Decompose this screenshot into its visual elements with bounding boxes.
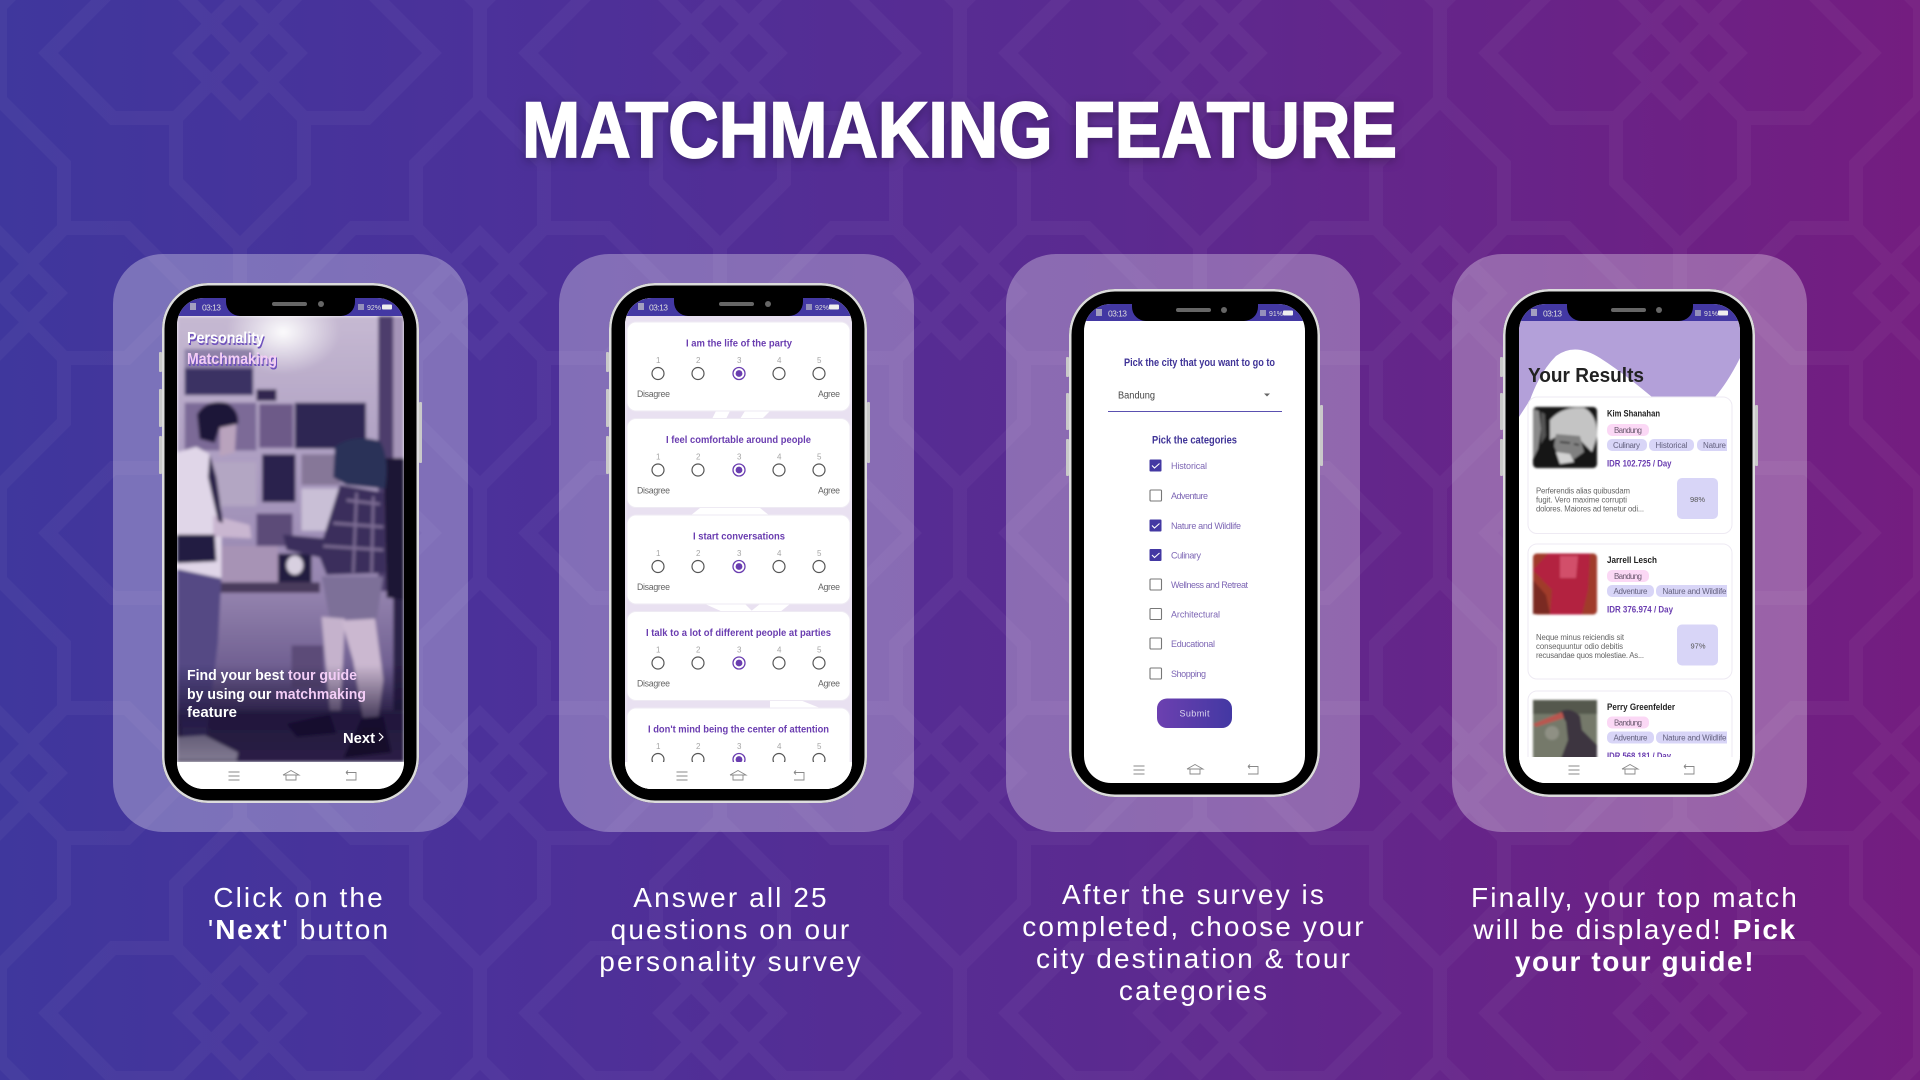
caption: step 3	[1022, 879, 1366, 1006]
category checklist: Adventure	[1171, 491, 1208, 501]
text: find your best tour guide	[187, 668, 366, 721]
screen: categories: 91%	[1269, 311, 1283, 318]
survey card 1: Agree	[818, 389, 840, 399]
guide card: Kim Shanahan: Kim Shanahan	[1607, 408, 1660, 420]
navigation bar	[228, 770, 356, 780]
survey card 2: 12345	[656, 452, 822, 462]
survey card 4: Disagree	[637, 678, 670, 688]
category checklist	[1150, 460, 1248, 679]
survey card 5	[627, 708, 850, 797]
survey card 1: 12345	[656, 356, 822, 365]
survey card 2: Disagree	[637, 486, 670, 496]
guide card: Kim Shanahan: IDR 102.725 / Day	[1607, 458, 1672, 470]
guide card: Perry Greenfelder: Adventure	[1614, 734, 1648, 742]
screen: results: 91%	[1704, 311, 1718, 318]
survey card 3: I start conversations	[693, 530, 785, 542]
caption: step 3: completed, choose your	[1022, 911, 1366, 942]
screen: intro	[177, 298, 404, 789]
guide card: Jarrell Lesch	[1528, 544, 1732, 679]
navigation bar	[1568, 764, 1694, 774]
guide card: Jarrell Lesch: Nature and Wildlife	[1662, 587, 1727, 596]
guide card: Perry Greenfelder: Nature and Wildlife	[1662, 734, 1727, 742]
screen: survey	[625, 298, 852, 789]
caption: step 1: 'Next' button	[208, 914, 390, 945]
guide card: Jarrell Lesch: recusandae quos molestiae. As...	[1536, 651, 1644, 660]
panel: step 3 city and categories	[1006, 254, 1360, 832]
screen: results: 03:13	[1543, 308, 1562, 318]
portrait: Jarrell Lesch	[1533, 554, 1597, 614]
heading: personality matchmaking	[187, 330, 277, 368]
category checklist: Nature and Wildlife	[1171, 521, 1241, 531]
heading: your results: Your Results	[1528, 364, 1644, 387]
caption: step 2: questions on our	[611, 914, 851, 945]
guide card: Kim Shanahan: fugit. Vero maxime corrupti	[1536, 496, 1627, 504]
navigation bar	[1134, 764, 1258, 774]
next button: Next	[343, 730, 375, 747]
guide card: Jarrell Lesch: 97%	[1690, 642, 1706, 650]
phone: your results	[1503, 289, 1755, 797]
survey card 1: I am the life of the party	[686, 338, 792, 350]
screen: survey: 03:13	[649, 302, 668, 312]
guide card: Perry Greenfelder: IDR 568.181 / Day	[1607, 751, 1672, 762]
caption: step 1: Click on the	[213, 882, 385, 913]
survey card 2: I feel comfortable around people	[666, 434, 811, 446]
survey card 4: 12345	[656, 646, 822, 654]
navigation bar	[676, 770, 804, 780]
submit button	[1157, 698, 1232, 728]
guide card: Jarrell Lesch: consequuntur odio debitis	[1536, 642, 1623, 651]
heading: personality matchmaking: Personality	[187, 330, 264, 347]
notch	[1567, 304, 1693, 321]
phone: personality survey	[609, 283, 867, 803]
category checklist: Architectural	[1171, 610, 1220, 620]
category checklist: Historical	[1171, 461, 1207, 471]
guide card: Kim Shanahan: Nature	[1703, 441, 1727, 450]
panel: step 1 next button	[113, 254, 468, 832]
caption: step 2: personality survey	[599, 946, 863, 977]
survey card 4: Agree	[818, 678, 840, 688]
caption: step 4	[1471, 882, 1799, 977]
screen: survey: 92%	[815, 305, 829, 312]
guide card: Jarrell Lesch: Jarrell Lesch	[1607, 555, 1657, 566]
category checklist: Culinary	[1171, 550, 1202, 560]
submit button: Submit	[1180, 708, 1210, 718]
survey card 5: 12345	[656, 742, 822, 751]
caption: step 4: Finally, your top match	[1471, 882, 1799, 913]
guide card: Perry Greenfelder: Perry Greenfelder	[1607, 702, 1675, 713]
phone: personality matchmaking intro	[162, 283, 419, 803]
survey card 1: Disagree	[637, 389, 670, 399]
notch	[1132, 304, 1258, 321]
heading: personality matchmaking: Matchmaking	[187, 351, 277, 368]
guide card: Jarrell Lesch: Bandung	[1614, 572, 1642, 581]
caption: step 3: After the survey is	[1062, 879, 1326, 910]
heading: pick the city: Pick the city that you want to go to	[1124, 357, 1275, 369]
notch	[226, 298, 355, 316]
survey card 3: Agree	[818, 582, 840, 592]
city dropdown: Bandung	[1118, 390, 1155, 402]
guide card: Jarrell Lesch: IDR 376.974 / Day	[1607, 604, 1674, 616]
text: find your best tour guide: feature	[187, 705, 237, 721]
survey card 5: I don't mind being the center of attention	[648, 724, 829, 736]
guide card: Perry Greenfelder	[1528, 691, 1732, 826]
survey card 1	[627, 322, 850, 411]
portrait: Perry Greenfelder	[1533, 700, 1597, 761]
guide card: Kim Shanahan: Perferendis alias quibusdam	[1536, 486, 1630, 496]
caption: step 2: Answer all 25	[633, 882, 829, 913]
portrait: Kim Shanahan	[1533, 407, 1597, 468]
caption: step 3: categories	[1119, 975, 1269, 1006]
notch	[674, 298, 803, 316]
guide card: Jarrell Lesch: Neque minus reiciendis sit	[1536, 633, 1625, 642]
screen: categories: 03:13	[1108, 308, 1127, 318]
guide card: Kim Shanahan: 98%	[1690, 495, 1705, 504]
category checklist: Shopping	[1171, 669, 1206, 679]
caption: step 3: city destination & tour	[1036, 943, 1352, 974]
text: find your best tour guide: by using our matchmaking	[187, 687, 366, 703]
survey card 4: I talk to a lot of different people at parties	[646, 627, 831, 639]
guide card: Jarrell Lesch: Adventure	[1614, 587, 1648, 596]
panel: step 2 survey	[559, 254, 914, 832]
phone: city and categories	[1069, 289, 1320, 797]
guide card: Kim Shanahan	[1528, 397, 1732, 534]
guide card: Perry Greenfelder: Bandung	[1614, 718, 1642, 728]
guide card: Kim Shanahan: Historical	[1656, 441, 1688, 450]
caption: step 4: will be displayed! Pick	[1473, 914, 1797, 945]
survey card 3: 12345	[656, 549, 822, 558]
survey card 4	[627, 612, 850, 700]
heading: pick the categories: Pick the categories	[1152, 434, 1237, 446]
photo: two travellers at notice board	[177, 316, 404, 762]
screen: intro: 03:13	[202, 302, 221, 312]
survey card 2	[627, 418, 850, 508]
survey card 2: Agree	[818, 486, 840, 496]
caption: step 4: your tour guide!	[1515, 946, 1755, 977]
screen: results	[1519, 304, 1740, 783]
screen: intro: 92%	[367, 305, 381, 312]
text: find your best tour guide: Find your best tour guide	[187, 668, 357, 684]
caption: step 1	[208, 882, 390, 945]
survey card 3	[627, 515, 850, 604]
guide card: Kim Shanahan: dolores. Maiores ad tenetur odi...	[1536, 504, 1644, 514]
guide card: Kim Shanahan: Bandung	[1614, 426, 1642, 435]
survey card 3: Disagree	[637, 582, 670, 592]
category checklist: Wellness and Retreat	[1171, 580, 1248, 590]
screen: categories	[1084, 304, 1305, 783]
panel: step 4 results	[1452, 254, 1807, 832]
category checklist: Educational	[1171, 639, 1215, 649]
city dropdown	[1108, 390, 1282, 412]
caption: step 2	[599, 882, 863, 977]
guide card: Kim Shanahan: Culinary	[1613, 441, 1640, 450]
